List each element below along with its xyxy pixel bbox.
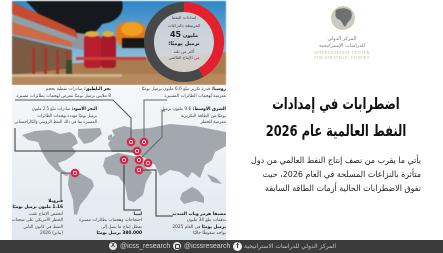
donut centre text: برميل يوميًا؛ — [168, 41, 200, 47]
text: Russia — [142, 86, 226, 99]
text: Venezuela — [12, 198, 63, 236]
text: Libya: تعطل إنتاج ما يصل إلى — [101, 225, 142, 230]
text: intro paragraph: تفوق الاضطرابات الحالية أزمات الطاقة السابقة — [265, 183, 421, 193]
text: Libya: 380.000 برميل يوميًا — [97, 231, 142, 236]
text: Baltic Sea: بحر البلطيق: صادرات نفطية بحجم — [46, 87, 111, 92]
text: Baltic Sea: 8 ملايين برميل يوميًا تتعرض لهجمات بطائرات مسيرة — [16, 94, 111, 99]
title: اضطرابات في إمدادات — [272, 95, 400, 113]
icon: Facebook: f — [236, 243, 239, 250]
donut centre text: من الإنتاج العالمي — [168, 55, 199, 60]
text: Black Sea: المسيرة بما في ذلك النفط الروسي والكازاخستاني — [14, 120, 97, 125]
text: Hormuz and Bab al-Mandab: تدفقات تبلغ 34 مليون — [187, 218, 226, 223]
icon: X: X — [111, 243, 115, 249]
title — [266, 95, 406, 140]
text: Hormuz and Bab al-Mandab — [172, 212, 226, 236]
logo: International Center for Strategic Studies — [314, 6, 370, 60]
icon: X — [109, 242, 117, 250]
text: Venezuela: الحظر الأمريكي على شحنات — [12, 218, 63, 223]
text: Black Sea: البحر الأسود: صادرات تبلغ 2.5 مليون — [32, 107, 97, 112]
text: intro paragraph: يأتي ما يقرب من نصف إنتاج النفط العالمي من دول — [251, 155, 421, 165]
text: Venezuela: 1.16 مليون برميل يوميًا — [12, 205, 63, 210]
text: Baltic Sea — [16, 86, 111, 99]
logo Arabic name: للدراسات الإستراتيجية — [319, 43, 365, 49]
donut centre text: أكثر من ثلثه — [174, 49, 194, 54]
text: Hormuz and Bab al-Mandab: مضيقا هرمز وباب المندب — [172, 212, 226, 217]
text: centre name: المركز الدولي للدراسات الاستراتيجية — [244, 243, 336, 250]
text: Libya — [79, 212, 142, 236]
text: Middle East: يوميًا من الطاقة التكريرية — [181, 114, 226, 119]
logo English name — [314, 50, 370, 60]
text: Hormuz and Bab al-Mandab: برميل يوميًا في العام 2025 — [172, 225, 226, 230]
text: Russia: روسيا: قدرة تكرير تبلغ 6.6 مليون برميل يوميًا — [142, 87, 226, 92]
text: Venezuela: (يناير) 2026 — [40, 231, 63, 236]
chart: donut of oil supply share — [144, 2, 224, 82]
text: Instagram handle: @icssresearch — [184, 243, 230, 250]
text: X handle: @icss_research — [120, 243, 170, 250]
icon: Instagram — [173, 242, 181, 250]
text: intro paragraph: متأثرة بالنزاعات المسلحة في العام 2026، حيث — [262, 169, 421, 179]
text: Venezuela: فنزويلا — [48, 199, 63, 204]
text: intro paragraph — [251, 154, 421, 193]
footer bar — [0, 240, 443, 253]
text: Black Sea: برميل يوميًا مهددة بهجمات الطائرات — [37, 114, 97, 119]
text: Middle East — [161, 106, 226, 125]
donut centre text: مليون 45 — [170, 30, 198, 39]
icon: Facebook — [233, 242, 242, 251]
text: Russia: معرضة لهجمات الطائرات المسيرة — [164, 94, 226, 99]
title: النفط العالمية عام 2026 — [266, 122, 406, 140]
panel: oil fire photo — [11, 0, 227, 86]
text: Venezuela: النفط في كانون الثاني — [23, 225, 63, 230]
donut centre text: إمدادات النفط — [172, 15, 196, 20]
text: Middle East: معرضة للخطر — [201, 120, 226, 125]
logo English name: FOR STRATEGIC STUDIES — [314, 55, 370, 60]
map markers: conflict locations — [70, 138, 152, 178]
text: Middle East: الشرق الأوسط: 9.6 مليون برميل — [161, 107, 226, 112]
text: Libya: ليبيا — [134, 212, 142, 217]
leader lines — [14, 100, 173, 216]
logo English name: INTERNATIONAL CENTER — [314, 50, 370, 55]
donut centre text — [168, 15, 200, 60]
text: Hormuz and Bab al-Mandab: تواجه ضغوطًا حاليًا — [193, 231, 226, 236]
donut centre text: المرتبطة بالنزاعات — [168, 23, 200, 28]
logo Arabic name — [319, 36, 365, 49]
text: Libya: احتجاجات وهجمات بطائرات مسيرة — [79, 218, 142, 223]
text: Black Sea — [14, 106, 97, 125]
logo Arabic name: المركز الدولي — [328, 36, 356, 42]
icon: globe — [331, 6, 355, 30]
text: Venezuela: انخفض الإنتاج عقب — [28, 212, 63, 217]
panel: world map — [12, 85, 226, 240]
